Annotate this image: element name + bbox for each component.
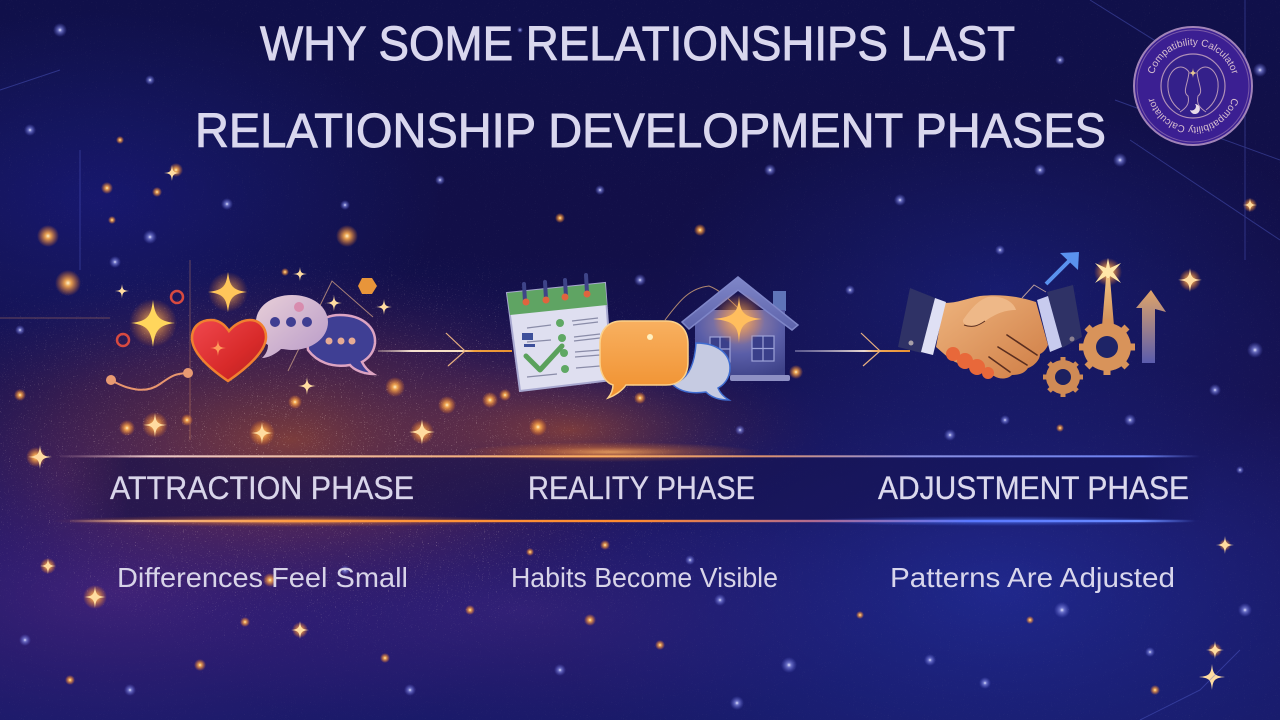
icon: blue arrow — [1046, 252, 1079, 284]
title line 1: WHY SOME RELATIONSHIPS LAST — [260, 18, 1015, 71]
title — [195, 18, 1106, 158]
icon: house — [682, 277, 798, 381]
icon: handshake — [898, 285, 1082, 379]
icon: constellation line — [288, 281, 373, 371]
icon: rings — [117, 291, 183, 346]
icon: up arrow — [1136, 290, 1166, 363]
icon: orange speech bubble — [600, 321, 688, 398]
icon: grey speech bubble — [672, 343, 730, 400]
upper divider line — [60, 442, 1200, 462]
text: habits become visible: Habits Become Visible — [511, 562, 778, 593]
icon: star and stem — [1094, 258, 1122, 326]
label: adjustment phase: ADJUSTMENT PHASE — [878, 470, 1189, 506]
icon: calendar checklist — [507, 275, 612, 391]
panel: attraction phase — [106, 272, 414, 593]
icon: hexagon — [358, 278, 377, 294]
icon: reality cluster — [507, 275, 798, 400]
logo badge: Compatibility Calculator: Compatibility Calculator — [1148, 98, 1238, 134]
logo badge: Compatibility Calculator: Compatibility Calculator — [1148, 38, 1238, 74]
icon: blue speech bubble — [308, 315, 375, 374]
panel: adjustment phase — [878, 252, 1189, 593]
icon: gold star — [129, 299, 177, 347]
icon: arc over handshake — [1022, 285, 1046, 298]
panel: reality phase — [507, 275, 798, 593]
icon: small gold star — [208, 272, 248, 312]
arrow: reality to adjustment — [795, 333, 910, 366]
icon: squiggle connector — [106, 368, 193, 390]
text: differences feel small: Differences Feel Small — [117, 562, 408, 593]
text: patterns are adjusted: Patterns Are Adjusted — [890, 562, 1175, 593]
label: attraction phase: ATTRACTION PHASE — [110, 470, 414, 506]
icon: large gear — [1079, 319, 1135, 375]
icon: attraction cluster — [106, 272, 377, 390]
lower divider line — [50, 515, 1200, 527]
logo badge: Compatibility Calculator — [1133, 26, 1253, 146]
title line 2: RELATIONSHIP DEVELOPMENT PHASES — [195, 105, 1106, 158]
icon: heart — [192, 320, 266, 381]
icon: adjustment cluster — [898, 252, 1166, 397]
divider band behind phase labels — [60, 458, 1210, 520]
icon: constellation arc — [665, 286, 740, 320]
icon: light speech bubble — [256, 295, 328, 358]
arrow: attraction to reality — [378, 333, 512, 366]
label: reality phase: REALITY PHASE — [528, 470, 755, 506]
icon: small gear — [1043, 357, 1083, 397]
